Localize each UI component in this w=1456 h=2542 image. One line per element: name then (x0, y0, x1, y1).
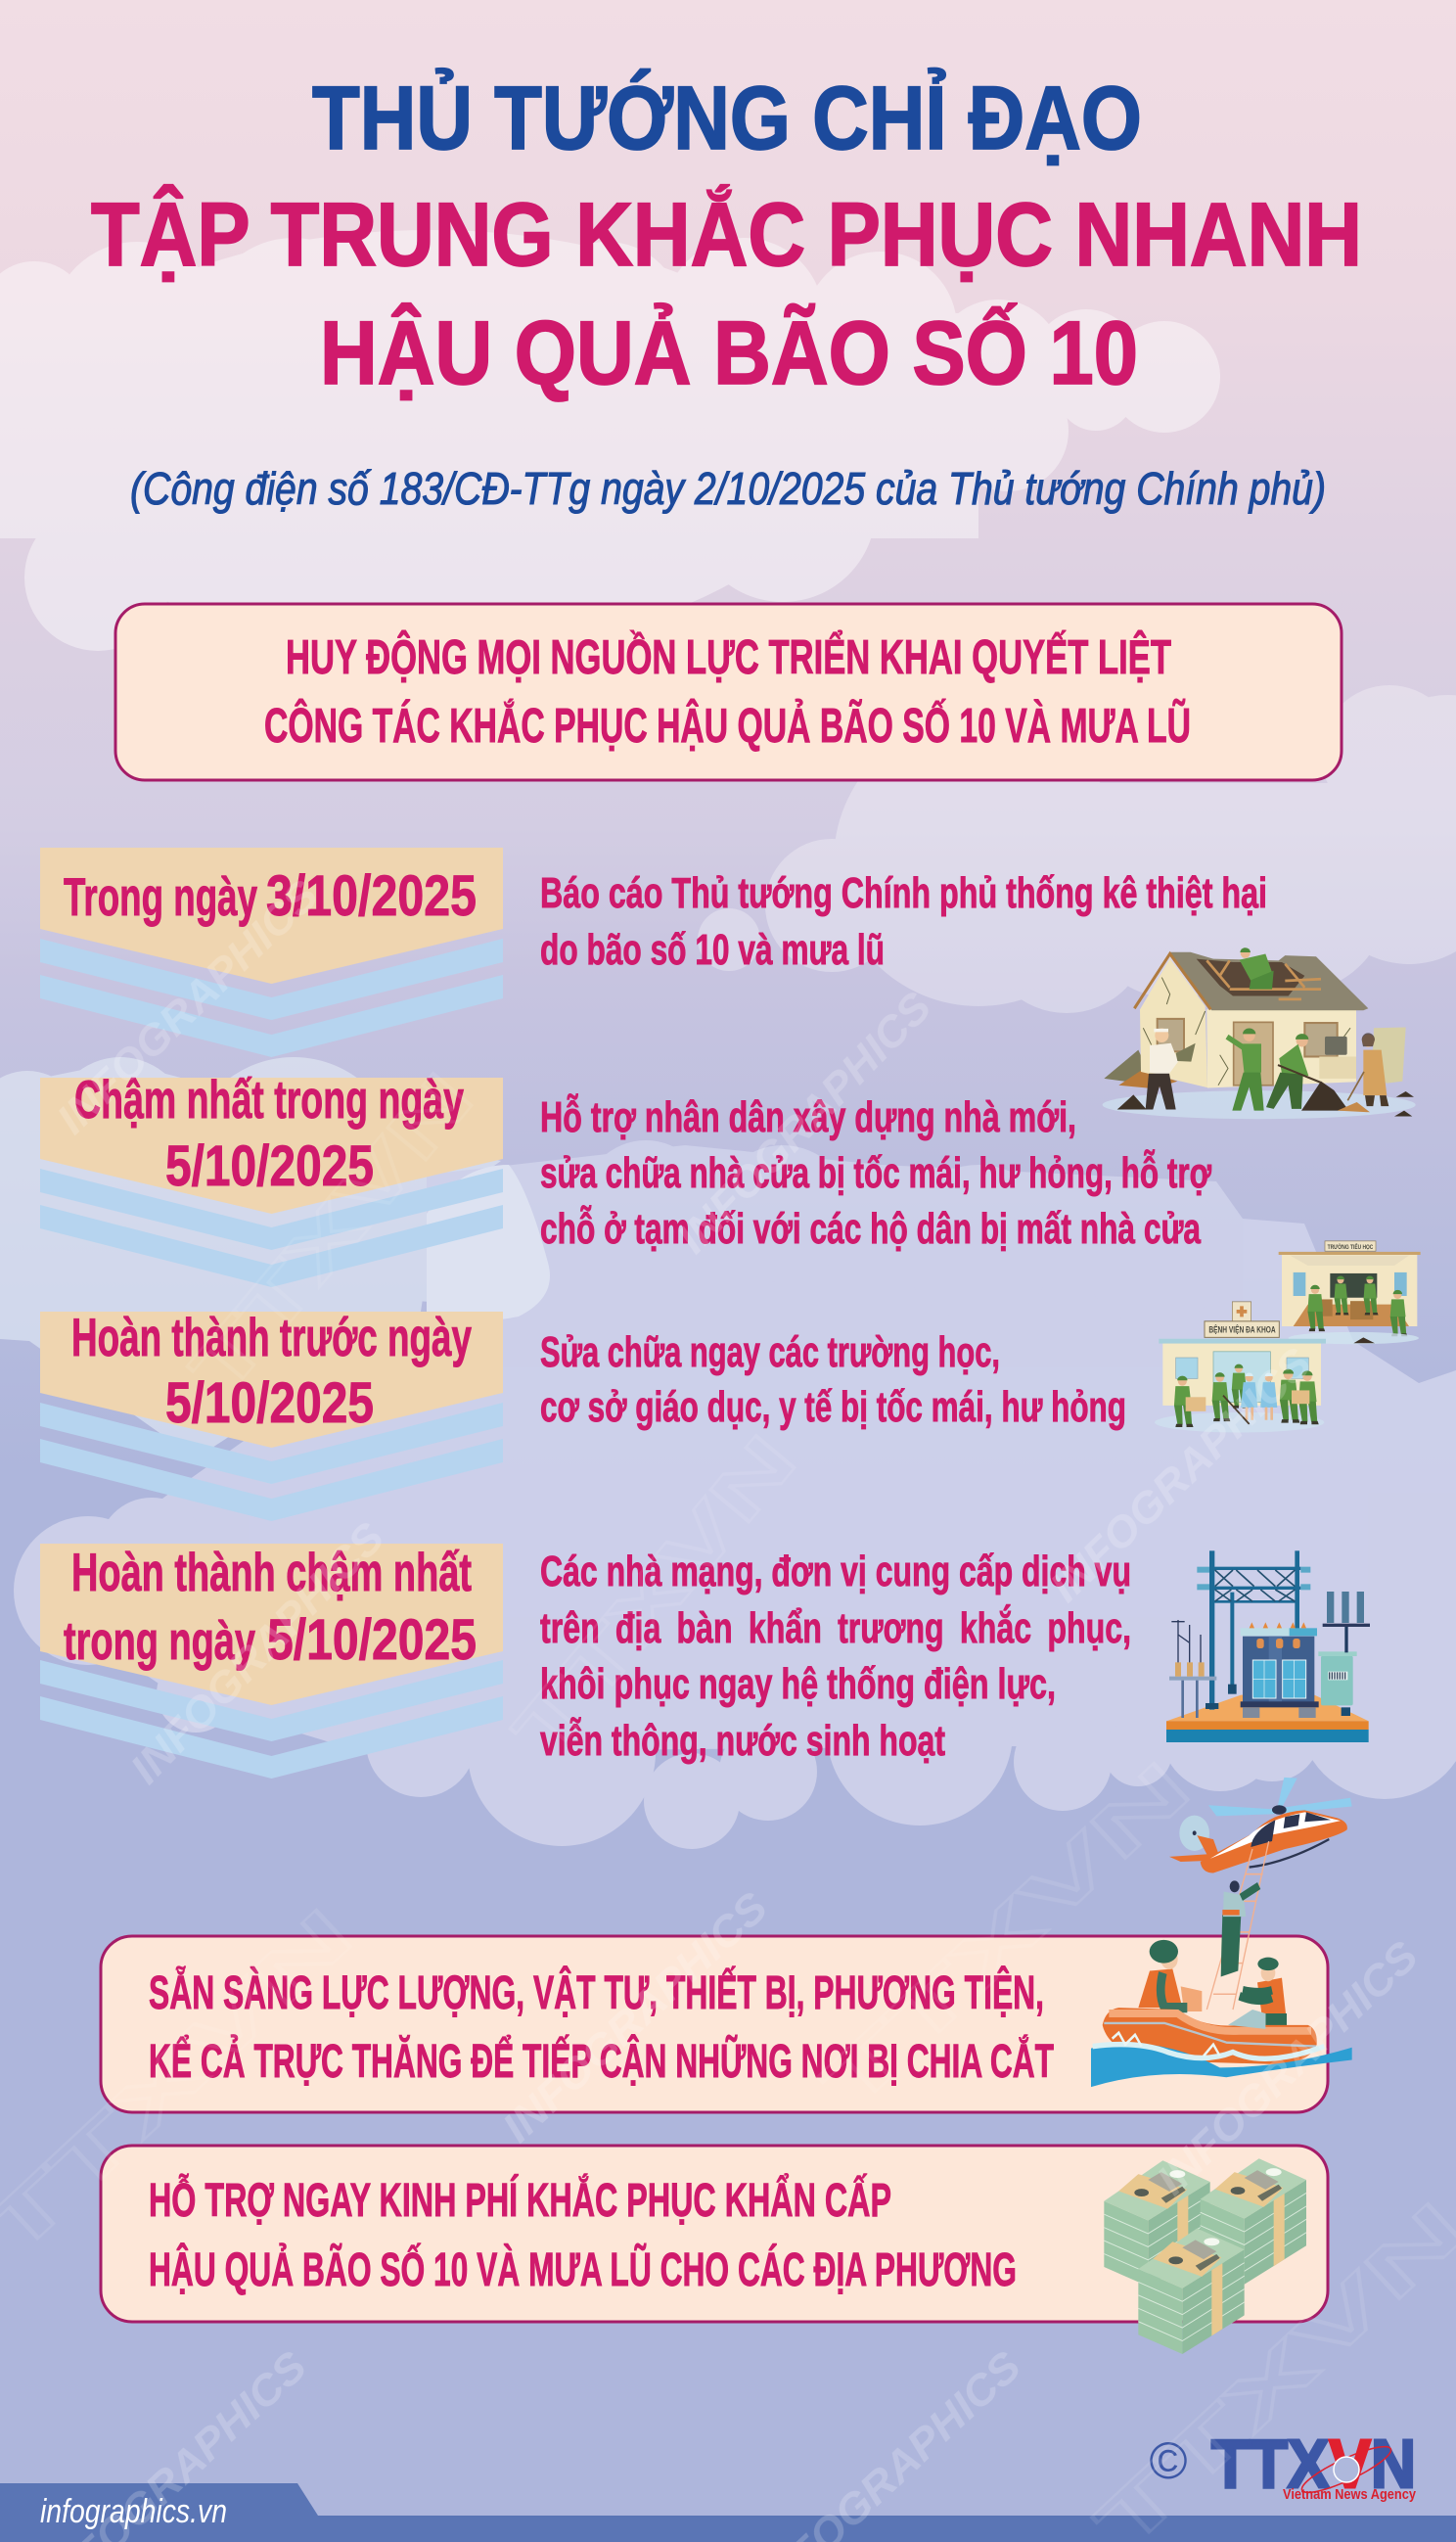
cloud: middle left light blue cloud (0, 1057, 501, 1458)
watermarks: diagonal agency marks (0, 871, 1456, 2542)
watermarks: diagonal agency marks: TTXVN (497, 1419, 811, 1772)
icon: school and hospital being repaired: TRƯỜNG TIỂU HỌC (1328, 1242, 1374, 1251)
logo: copyright mark: © (1149, 2432, 1188, 2490)
icon: stacks of money (1104, 2158, 1306, 2354)
watermarks: diagonal agency marks: INFOGRAPHICS (1041, 1339, 1321, 1611)
timeline chevron: chậm nhất 5/10/2025: Chậm nhất trong ngày (74, 1069, 464, 1130)
text: item 2: Hỗ trợ nhân dân xây dựng nhà mới, (540, 1092, 1076, 1141)
watermarks: diagonal agency marks: INFOGRAPHICS (668, 983, 940, 1263)
timeline chevron: hoàn thành chậm nhất 5/10/2025: trong ngày (64, 1610, 255, 1671)
watermarks: diagonal agency marks: TTXVN (174, 1057, 488, 1410)
timeline chevron: 3/10/2025: Trong ngày (64, 866, 257, 927)
logo: TTXVN: Vietnam News Agency (1283, 2486, 1417, 2503)
text: item 4 (540, 1548, 1131, 1765)
text: item 1 (540, 869, 1267, 974)
cloud: upper right cloud behind first item (698, 685, 1456, 1013)
title: HẬU QUẢ BÃO SỐ 10 (320, 302, 1138, 403)
watermarks: diagonal agency marks: INFOGRAPHICS (493, 1883, 777, 2151)
panel: readiness box (101, 1936, 1328, 2112)
icon: damaged house being repaired (1103, 947, 1416, 1119)
footer: website label: infographics.vn (40, 2493, 227, 2530)
icon: electrical substation (1166, 1550, 1370, 1742)
icon: school and hospital being repaired (1155, 1241, 1421, 1432)
timeline chevron: 3/10/2025 (40, 848, 503, 1057)
text: item 3 (540, 1328, 1126, 1431)
timeline chevron: chậm nhất 5/10/2025: 5/10/2025 (165, 1134, 374, 1198)
cloud: top pink-white cloud behind title (0, 230, 1220, 651)
text: item 2 (540, 1092, 1212, 1253)
timeline chevron: hoàn thành chậm nhất 5/10/2025: Hoàn thành chậm nhất (71, 1542, 472, 1602)
cloud: large lavender cloud in lower middle (14, 1140, 1456, 1849)
text: item 4: viễn thông, nước sinh hoạt (540, 1716, 945, 1765)
text: item 2: sửa chữa nhà cửa bị tốc mái, hư hỏng, hỗ trợ (540, 1148, 1212, 1197)
text: item 1: do bão số 10 và mưa lũ (540, 926, 885, 974)
watermarks: diagonal agency marks: INFOGRAPHICS (121, 1513, 393, 1793)
watermarks: diagonal agency marks: INFOGRAPHICS (48, 871, 328, 1143)
text: item 3: Sửa chữa ngay các trường học, (540, 1328, 1000, 1376)
timeline chevron: chậm nhất 5/10/2025 (40, 1069, 503, 1287)
timeline chevron: 3/10/2025: 3/10/2025 (266, 864, 477, 928)
panel: funding box: HỖ TRỢ NGAY KINH PHÍ KHẮC PHỤC KHẨN CẤP (149, 2173, 891, 2227)
title (91, 68, 1362, 403)
timeline chevron: hoàn thành trước 5/10/2025: Hoàn thành trước ngày (71, 1307, 472, 1367)
timeline chevron: hoàn thành chậm nhất 5/10/2025 (40, 1542, 503, 1779)
timeline chevron: hoàn thành trước 5/10/2025 (40, 1307, 503, 1521)
timeline chevron: hoàn thành chậm nhất 5/10/2025: 5/10/2025 (267, 1608, 477, 1672)
watermarks: diagonal agency marks: TTXVN (806, 1745, 1206, 2126)
timeline chevron: hoàn thành trước 5/10/2025: 5/10/2025 (165, 1371, 374, 1435)
text: item 4: Các nhà mạng, đơn vị cung cấp dịch vụ (540, 1548, 1131, 1595)
panel: main directive box (115, 604, 1342, 780)
icon: school and hospital being repaired: BỆNH VIỆN ĐA KHOA (1208, 1323, 1276, 1335)
logo: TTXVN: TTXVN (1211, 2426, 1416, 2502)
icon: rescue helicopter and boat (1091, 1778, 1352, 2087)
text: item 4: trên địa bàn khẩn trương khắc phục, (540, 1603, 1131, 1652)
text: item 2: chỗ ở tạm đối với các hộ dân bị mất nhà cửa (540, 1204, 1201, 1253)
text: item 3: cơ sở giáo dục, y tế bị tốc mái, hư hỏng (540, 1383, 1126, 1431)
watermarks: diagonal agency marks: INFOGRAPHICS (1148, 1932, 1428, 2204)
panel: funding box: HẬU QUẢ BÃO SỐ 10 VÀ MƯA LŨ CHO CÁC ĐỊA PHƯƠNG (149, 2242, 1017, 2296)
cloud: lighter overlap near centre (427, 1165, 550, 1321)
title: THỦ TƯỚNG CHỈ ĐẠO (312, 68, 1142, 168)
footer: bottom band with tab (0, 2483, 1456, 2542)
panel: funding box (101, 2146, 1328, 2322)
text: item 4: khôi phục ngay hệ thống điện lực, (540, 1660, 1056, 1708)
